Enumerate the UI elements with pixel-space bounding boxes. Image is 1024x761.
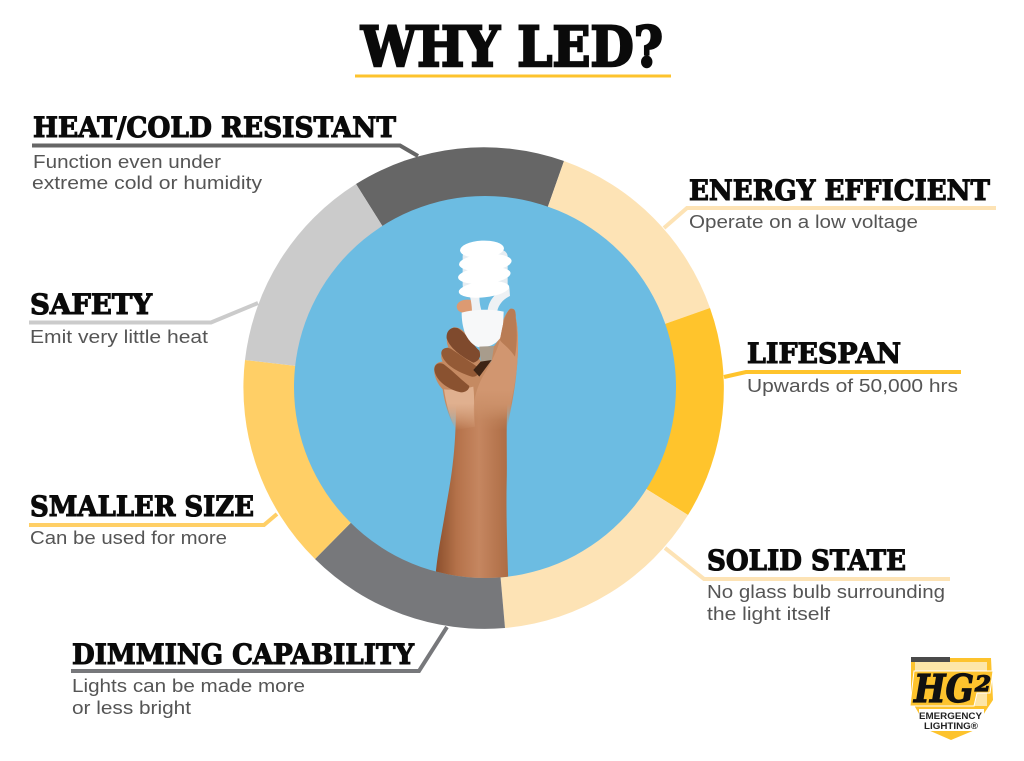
hand [434, 309, 518, 430]
centre blue circle [294, 196, 676, 578]
arm [435, 403, 508, 583]
thumb [473, 309, 518, 420]
callout: heat/cold resistant [32, 111, 418, 193]
finger: middle [441, 348, 479, 377]
heading: SAFETY [30, 288, 153, 321]
wordmark HG2: 2 [974, 671, 991, 696]
wordmark backing [910, 671, 993, 706]
segment: safety [245, 184, 484, 388]
wordmark HG2: HG [913, 666, 974, 711]
callout: lifespan [724, 337, 961, 396]
palm highlight [444, 387, 475, 430]
description: Upwards of 50,000 hrs [747, 376, 958, 396]
emergency lighting text: LIGHTING® [924, 721, 978, 731]
finger: bottom [434, 363, 469, 392]
description: extreme cold or humidity [32, 173, 262, 193]
callout: energy efficient [664, 174, 996, 232]
heading: DIMMING CAPABILITY [72, 638, 415, 671]
leader line [29, 303, 258, 322]
callout: dimming capability [71, 627, 447, 718]
screw cap [479, 346, 494, 364]
description: Lights can be made more [72, 676, 305, 696]
logo: HG2 Emergency Lighting [910, 657, 993, 740]
segment: lifespan [484, 308, 724, 515]
top bar [911, 657, 950, 662]
leader line [71, 627, 447, 671]
callout: safety [29, 288, 258, 347]
description: No glass bulb surrounding [707, 582, 945, 602]
title: WHY LED? [360, 14, 663, 79]
description: Function even under [33, 152, 221, 172]
donut ring chart [243, 147, 724, 629]
finger: top [447, 328, 480, 363]
thumb ridge [500, 309, 517, 357]
heading: HEAT/COLD RESISTANT [33, 111, 396, 144]
description: Emit very little heat [30, 327, 208, 347]
heading: SMALLER SIZE [30, 490, 254, 523]
shield inner panel [915, 662, 987, 706]
lower white panel [919, 709, 984, 731]
spiral bulb [457, 240, 512, 312]
index finger tip [457, 300, 473, 313]
description: the light itself [707, 604, 831, 624]
shadow under bulb [473, 360, 492, 377]
description: Can be used for more [30, 528, 227, 548]
segment: solid state [484, 388, 688, 628]
leader line [29, 514, 277, 525]
segment: dimming capability [315, 388, 505, 629]
heading: LIFESPAN [747, 337, 901, 370]
segment: heat/cold resistant [356, 147, 564, 388]
heading: SOLID STATE [707, 544, 906, 577]
shield [911, 658, 993, 740]
emergency lighting text: EMERGENCY [919, 711, 982, 721]
leader line [665, 548, 950, 579]
leader line [664, 208, 996, 228]
callout: solid state [665, 544, 950, 624]
leader line [724, 372, 961, 377]
description: Operate on a low voltage [689, 212, 918, 232]
callout: smaller size [29, 490, 277, 548]
segment: smaller size [243, 360, 484, 559]
emergency lighting text [919, 711, 982, 731]
bulb base [462, 310, 504, 347]
segment: energy efficient [484, 161, 710, 388]
description: or less bright [72, 698, 191, 718]
heading: ENERGY EFFICIENT [689, 174, 990, 207]
illustration: hand holding bulb [434, 240, 518, 583]
leader line [32, 146, 418, 156]
